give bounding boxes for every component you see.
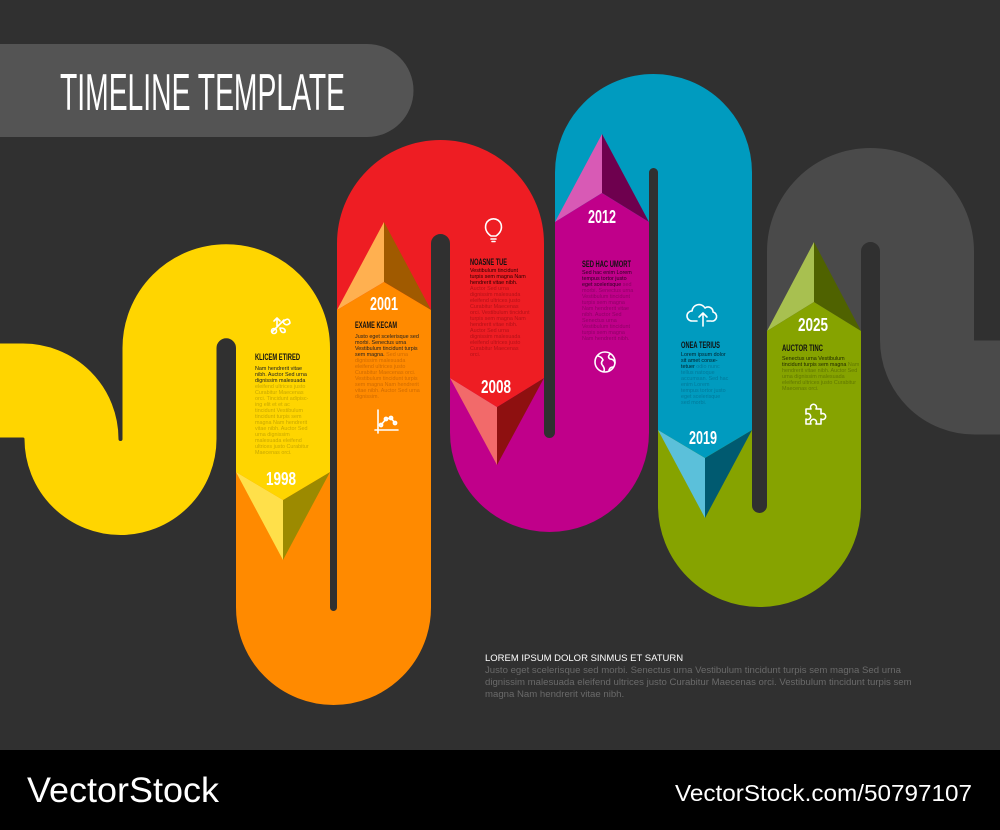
text block: 1998: orci. Tincidunt adipisc-: [255, 396, 309, 402]
text block: 2025: hendrerit vitae nibh. Auctor Sed: [782, 368, 857, 374]
text block: 1998: Maecenas orci.: [255, 450, 292, 456]
year 1998: 1998: [266, 469, 296, 489]
text block: 1998: KLICEM ETIRED: [255, 352, 300, 362]
text block: 2008: NOASNE TUE: [470, 257, 507, 267]
text block: 2012: Nam hendrerit nibh.: [582, 336, 629, 342]
year 2025: 2025: [798, 315, 828, 335]
text block: 2001: Vestibulum tincidunt turpis: [355, 376, 418, 382]
year 2008: 2008: [481, 377, 511, 397]
text block: 2008: Vestibulum tincidunt: [470, 268, 518, 274]
text block: 2001: vitae nibh. Auctor Sed urna: [355, 388, 420, 394]
text block: 2019: tetuer odio nunc: [681, 364, 720, 370]
text block: 2025: Senectus urna Vestibulum: [782, 356, 845, 362]
text block: 2019: sit amet conse-: [681, 358, 718, 364]
icon: bulb: [486, 219, 501, 242]
text block: 2008: Curabitur Maecenas: [470, 304, 519, 310]
text block: 2025: [782, 343, 860, 392]
ribbon: blue segment: [602, 121, 705, 430]
title banner: [0, 44, 414, 137]
icon: globe: [595, 352, 615, 372]
text block: 2025: eleifend ultrices justo Curabitur: [782, 380, 856, 386]
pyramid 2019: [658, 430, 752, 518]
text block: 1998: ing elit et et ac: [255, 402, 290, 408]
text block: 2025: urna dignissim malesuada: [782, 374, 845, 380]
text block: 2001: sem magna Nam hendrerit: [355, 382, 419, 388]
text block: 2019: Lorem ipsum dolor: [681, 352, 726, 358]
pyramid 2012: [555, 134, 649, 222]
text block: 2012: Sed hac enim Lorem: [582, 270, 632, 276]
ribbon: gray segment: [814, 195, 1000, 388]
text block: 2012: Vestibulum tincidunt: [582, 294, 630, 300]
text block: 1998: Nam hendrerit vitae: [255, 366, 302, 372]
text block: 2001: dignissim.: [355, 394, 379, 400]
text block: 1998: [255, 352, 309, 456]
text block: 2001: Vestibulum tincidunt turpis: [355, 346, 418, 352]
text block: 2012: nibh. Auctor Sed: [582, 312, 622, 318]
text block: 2001: eleifend ultrices justo: [355, 364, 405, 370]
icon: chart: [375, 410, 398, 433]
text block: 2008: Auctor Sed urna: [470, 328, 509, 334]
text block: 2012: turpis sem magna: [582, 330, 625, 336]
text block: 2012: Senectus urna: [582, 318, 617, 324]
ribbon: orange segment: [283, 310, 384, 658]
text block: 2008: Curabitur Maecenas: [470, 346, 519, 352]
pyramid 2025: [767, 242, 861, 331]
text block: 2019: sed morbi.: [681, 400, 706, 406]
text block: 2001: Justo eget scelerisque sed: [355, 334, 419, 340]
text block: 2019: enim Lorem: [681, 382, 710, 388]
icon: cloud upload: [687, 305, 717, 326]
bottom text block: magna Nam hendrerit vitae nibh.: [485, 689, 624, 700]
text block: 2019: eget scelerisque: [681, 394, 720, 400]
text block: 2008: dignissim malesuada: [470, 334, 520, 340]
text block: 2012: tempus tortor justo: [582, 276, 627, 282]
year 2001: 2001: [370, 294, 398, 314]
text block: 2025: tincidunt turpis sem magna Nam: [782, 362, 859, 368]
text block: 2025: Maecenas orci.: [782, 386, 819, 392]
text block: 1998: eleifend ultrices justo: [255, 384, 305, 390]
text block: 2008: turpis sem magna Nam: [470, 274, 526, 280]
text block: 2008: orci. Vestibulum tincidunt: [470, 310, 530, 316]
text block: 2001: [355, 320, 420, 400]
text block: 1998: Curabitur Maecenas: [255, 390, 304, 396]
text block: 2025: AUCTOR TINC: [782, 343, 823, 353]
ribbon: yellow segment: [0, 291, 283, 488]
text block: 2008: hendrerit vitae nibh.: [470, 322, 517, 328]
footer bar: VectorStock.com/50797107: [675, 780, 972, 806]
text block: 1998: ultrices justo Curabitur: [255, 444, 309, 450]
bottom text block: dignissim malesuada eleifend ultrices justo Curabitur Maecenas orci. Vestibulum tincidunt turpis sem: [485, 677, 912, 688]
text block: 2008: dignissim malesuada: [470, 292, 520, 298]
bottom text block: LOREM IPSUM DOLOR SINMUS ET SATURN: [485, 653, 683, 664]
text block: 1998: dignissim malesuada: [255, 378, 305, 384]
text block: 2012: Nam hendrerit vitae: [582, 306, 629, 312]
text block: 2008: turpis sem magna Nam: [470, 316, 526, 322]
year 2012: 2012: [588, 207, 616, 227]
ribbon: green segment: [705, 331, 814, 560]
year 2019: 2019: [689, 428, 717, 448]
title banner: TIMELINE TEMPLATE: [60, 64, 345, 122]
pyramid 2001: [337, 222, 431, 310]
text block: 2012: turpis sem magna: [582, 300, 625, 306]
ribbon: red segment: [384, 187, 497, 378]
text block: 2012: Vestibulum tincidunt: [582, 324, 630, 330]
text block: 2001: dignissim malesuada: [355, 358, 405, 364]
text block: 1998: magna Nam hendrerit: [255, 420, 308, 426]
text block: 2019: tellus natoque: [681, 370, 715, 376]
text block: 1998: tincidunt turpis sem: [255, 414, 302, 420]
text block: 1998: nibh. Auctor Sed urna: [255, 372, 307, 378]
text block: 2008: orci.: [470, 352, 480, 358]
text block: 2001: Curabitur Maecenas orci.: [355, 370, 415, 376]
text block: 2019: ONEA TERIUS: [681, 340, 720, 350]
text block: 2008: eleifend ultrices justo: [470, 298, 520, 304]
pyramid 1998: [236, 472, 330, 560]
text block: 2019: accumsan. Sed hac: [681, 376, 729, 382]
text block: 2019: [681, 340, 729, 406]
ribbon: magenta segment: [497, 222, 602, 485]
text block: 2012: SED HAC UMORT: [582, 259, 631, 269]
text block: 2012: eget scelerisque sed: [582, 282, 631, 288]
text block: 2008: Auctor Sed urna: [470, 286, 509, 292]
text block: 2001: morbi. Senectus urna: [355, 340, 406, 346]
text block: 1998: malesuada eleifend: [255, 438, 302, 444]
text block: 1998: vitae nibh. Auctor Sed: [255, 426, 307, 432]
bottom text block: [485, 653, 912, 700]
pyramid 2008: [450, 378, 544, 465]
text block: 2008: [470, 257, 530, 358]
text block: 2012: morbi. Senectus urna: [582, 288, 633, 294]
text block: 2008: eleifend ultrices justo: [470, 340, 520, 346]
footer bar: VectorStock: [27, 771, 220, 810]
icon: sprout: [272, 318, 290, 334]
icon: puzzle: [806, 404, 826, 424]
text block: 2012: [582, 259, 633, 342]
text block: 1998: urna dignissim: [255, 432, 290, 438]
footer bar: [0, 750, 1000, 830]
text block: 2019: tempus tortor justo: [681, 388, 726, 394]
text block: 2001: sem magna. Sed urna: [355, 352, 408, 358]
bottom text block: Justo eget scelerisque sed morbi. Senectus urna Vestibulum tincidunt turpis sem magna Sed urna: [485, 665, 902, 676]
text block: 2008: hendrerit vitae nibh.: [470, 280, 517, 286]
text block: 2001: EXAME KECAM: [355, 320, 397, 330]
text block: 1998: tincidunt Vestibulum: [255, 408, 303, 414]
